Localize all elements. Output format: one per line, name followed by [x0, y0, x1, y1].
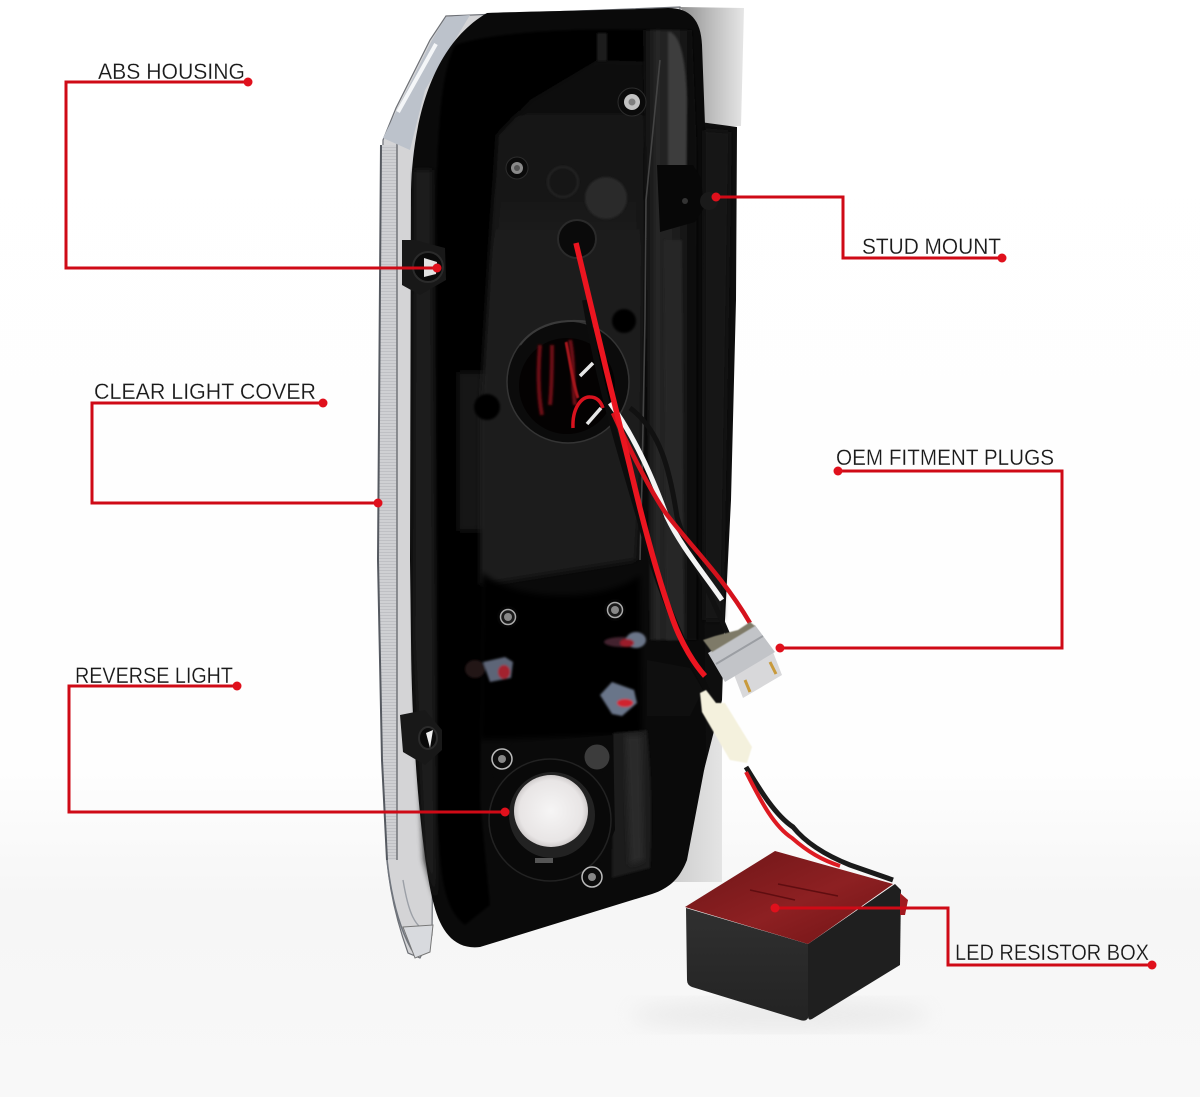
screws — [492, 88, 646, 887]
blurred bulb tips — [465, 632, 646, 716]
silver back panel — [680, 7, 744, 126]
callout: LED resistor box — [770, 904, 1156, 970]
mounting tabs — [400, 240, 446, 765]
dark mounting panel — [696, 122, 737, 770]
tail light assembly — [378, 7, 893, 958]
callout: stud mount — [712, 192, 1006, 262]
inner cavity shading — [436, 29, 655, 925]
floor shadow — [630, 999, 930, 1031]
reverse light socket — [489, 735, 615, 882]
lower rail — [612, 730, 651, 878]
stud mount block — [657, 165, 704, 232]
callout: OEM fitment plugs — [776, 445, 1062, 652]
left wall banding — [413, 170, 436, 900]
white plug — [700, 690, 752, 763]
clear light cover — [378, 7, 680, 958]
callout: reverse light — [69, 663, 510, 816]
socket block near plugs — [647, 660, 703, 716]
right rail — [643, 30, 698, 640]
callout: LED resistor box: LED RESISTOR BOX — [955, 940, 1149, 965]
callout: reverse light: REVERSE LIGHT — [75, 663, 233, 688]
large socket opening — [507, 321, 629, 443]
left column panels — [458, 372, 495, 531]
wire grommet — [558, 220, 596, 258]
callout: clear light cover — [92, 379, 382, 508]
grey plug — [703, 622, 782, 698]
callout: stud mount: STUD MOUNT — [862, 234, 1001, 259]
wire to resistor box — [746, 767, 893, 880]
wiring — [576, 243, 750, 692]
callout: clear light cover: CLEAR LIGHT COVER — [94, 379, 316, 404]
cover bottom fold — [403, 925, 433, 958]
callout: ABS housing: ABS HOUSING — [98, 59, 245, 84]
callout: ABS housing — [66, 59, 442, 272]
lower dark pocket — [480, 572, 642, 740]
callout: OEM fitment plugs: OEM FITMENT PLUGS — [836, 445, 1054, 470]
black housing — [410, 8, 706, 947]
center plate — [480, 60, 660, 585]
LED resistor box — [685, 851, 908, 1021]
faint plate circles — [585, 177, 627, 219]
